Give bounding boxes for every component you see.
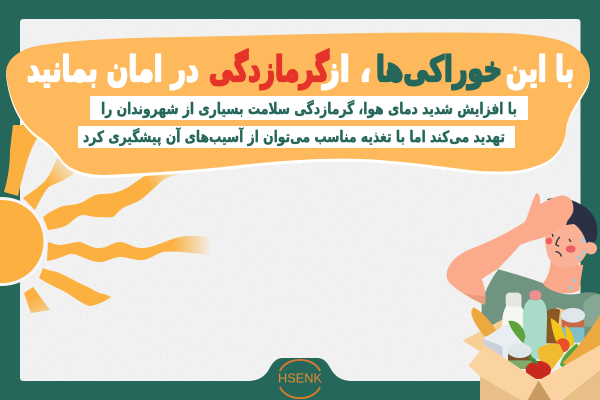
cheese: [537, 343, 564, 371]
logo tab: [250, 358, 350, 400]
illustration: man and food box: [447, 193, 600, 400]
jar right: [561, 308, 585, 343]
title: white start: با این: [506, 50, 574, 90]
title: white end: در امان بمانید: [27, 50, 199, 90]
box body left: [480, 376, 539, 400]
milk carton: [483, 323, 520, 360]
banner blob: [6, 32, 590, 178]
arm and hand: [447, 193, 573, 305]
bottle cap: [506, 293, 521, 307]
title: green word: خوراکی‌ها: [376, 50, 502, 90]
baguette left: [471, 307, 496, 336]
water cap: [529, 290, 541, 300]
box right flap: [538, 345, 600, 400]
sweat drops: [569, 237, 585, 290]
subtitle line 2: [78, 126, 515, 148]
eyes and nose: [552, 234, 571, 256]
box right body: [563, 371, 600, 400]
cheeks: [546, 238, 552, 244]
face: [545, 220, 590, 268]
box left flap: [469, 345, 538, 400]
brown bar: [545, 309, 560, 343]
logo text: HSENK: [278, 372, 323, 386]
leaf: [508, 321, 525, 343]
hair: [547, 198, 597, 243]
small jar: [508, 343, 532, 369]
title: red word: گرمازدگی: [209, 49, 329, 90]
bananas: [551, 318, 574, 350]
title: [27, 49, 574, 90]
ear: [585, 242, 597, 254]
water bottle: [523, 299, 547, 360]
box back flap: [463, 320, 520, 353]
shirt: [482, 269, 600, 340]
greens: [560, 343, 580, 368]
shirt shadow: [583, 294, 600, 327]
apple: [526, 356, 551, 379]
logo ring: [280, 360, 320, 398]
box centre peak: [528, 381, 551, 400]
orange tomato: [556, 338, 570, 352]
icon: sun with rays: [0, 125, 212, 313]
baguette right: [563, 315, 600, 366]
subtitle line 1: [90, 96, 528, 120]
elbow shadow: [463, 293, 486, 305]
title: comma and preposition: ، از: [321, 50, 371, 90]
milk bottle: [502, 293, 527, 337]
neck: [543, 262, 583, 293]
